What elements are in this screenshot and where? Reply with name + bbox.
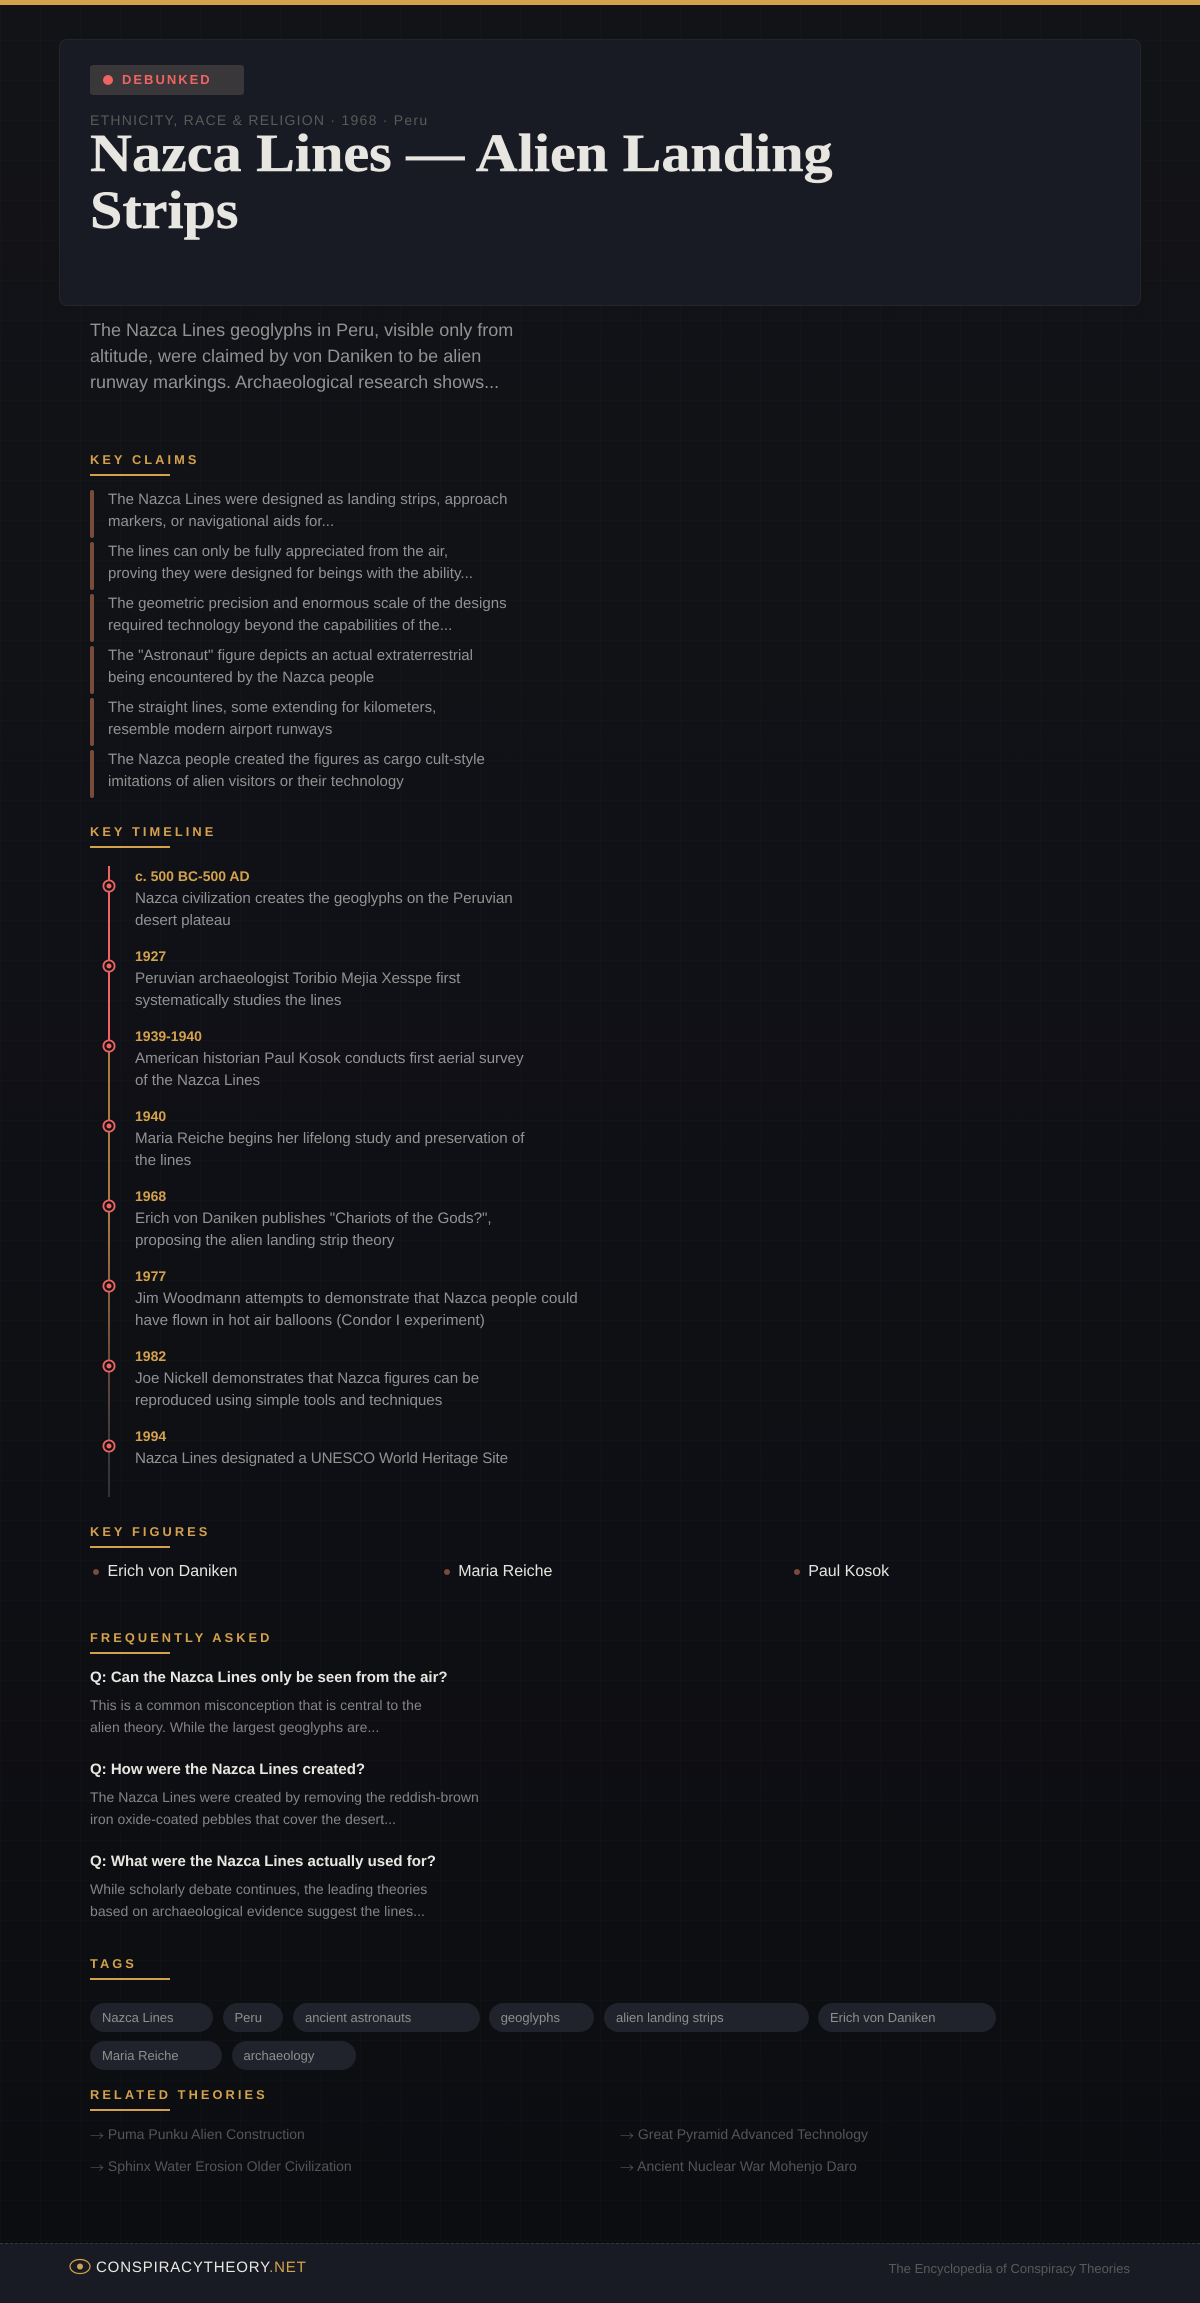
key figure: Erich von Daniken: Erich von Daniken bbox=[108, 1563, 237, 1580]
badge label: DEBUNKED bbox=[122, 72, 212, 87]
top accent bar bbox=[0, 0, 1200, 5]
timeline event: 1982 bbox=[102, 1348, 479, 1409]
timeline event: c. 500 BC-500 AD: desert plateau bbox=[135, 912, 231, 929]
claim 1: The Nazca Lines were designed as landing strips, approach bbox=[108, 491, 507, 508]
tag: Maria Reiche bbox=[102, 2048, 179, 2063]
icon: eye logo bbox=[69, 2258, 91, 2274]
timeline event: c. 500 BC-500 AD: c. 500 BC-500 AD bbox=[135, 868, 250, 884]
claim 2 bbox=[90, 542, 473, 590]
timeline event: 1940: 1940 bbox=[135, 1108, 166, 1124]
faq item 1: alien theory. While the largest geoglyphs are... bbox=[90, 1719, 379, 1735]
related theory link: → Ancient Nuclear War Mohenjo Daro bbox=[620, 2158, 857, 2178]
claim 6: imitations of alien visitors or their technology bbox=[108, 773, 404, 790]
claim 4: being encountered by the Nazca people bbox=[108, 669, 374, 686]
tag bbox=[222, 2003, 283, 2032]
faq item 1: Q: Can the Nazca Lines only be seen from the air? bbox=[90, 1669, 448, 1686]
timeline event: 1982: reproduced using simple tools and techniques bbox=[135, 1392, 442, 1409]
timeline event: c. 500 BC-500 AD: Nazca civilization creates the geoglyphs on the Peruvian bbox=[135, 890, 513, 907]
timeline event: 1968: Erich von Daniken publishes "Chariots of the Gods?", bbox=[135, 1210, 492, 1227]
footer bbox=[0, 2243, 1200, 2303]
tag bbox=[818, 2003, 996, 2032]
timeline event: 1939-1940 bbox=[102, 1028, 524, 1089]
tag: ancient astronauts bbox=[305, 2010, 411, 2025]
timeline event: 1982: 1982 bbox=[135, 1348, 166, 1364]
tag: Peru bbox=[234, 2010, 262, 2025]
tag: Nazca Lines bbox=[102, 2010, 174, 2025]
timeline event: 1968: 1968 bbox=[135, 1188, 166, 1204]
timeline event: 1927: Peruvian archaeologist Toribio Mejia Xesspe first bbox=[135, 970, 460, 987]
category meta line: ETHNICITY, RACE & RELIGION · 1968 · Peru bbox=[90, 112, 428, 128]
timeline event: 1927 bbox=[102, 948, 460, 1009]
timeline event: 1939-1940: 1939-1940 bbox=[135, 1028, 202, 1044]
intro text: altitude, were claimed by von Daniken to be alien bbox=[90, 346, 481, 366]
faq item 1: This is a common misconception that is central to the bbox=[90, 1697, 422, 1713]
timeline event: 1939-1940: American historian Paul Kosok conducts first aerial survey bbox=[135, 1050, 524, 1067]
timeline event: 1994: Nazca Lines designated a UNESCO World Heritage Site bbox=[135, 1450, 508, 1467]
key figure: Maria Reiche: Maria Reiche bbox=[458, 1563, 552, 1580]
tag bbox=[90, 2041, 222, 2070]
claim 5: The straight lines, some extending for kilometers, bbox=[108, 699, 436, 716]
claim 3: required technology beyond the capabilities of the... bbox=[108, 617, 452, 634]
timeline event: 1994: 1994 bbox=[135, 1428, 166, 1444]
intro text: The Nazca Lines geoglyphs in Peru, visible only from bbox=[90, 320, 513, 340]
claim 1 bbox=[90, 490, 507, 538]
faq item 3 bbox=[90, 1853, 436, 1919]
timeline event: 1982: Joe Nickell demonstrates that Nazca figures can be bbox=[135, 1370, 479, 1387]
tag list bbox=[90, 2003, 996, 2070]
timeline event: 1939-1940: of the Nazca Lines bbox=[135, 1072, 260, 1089]
site logo wordmark: CONSPIRACYTHEORY.NET bbox=[96, 2259, 307, 2276]
tag: geoglyphs bbox=[501, 2010, 560, 2025]
title: Strips bbox=[90, 180, 239, 240]
timeline event: 1977 bbox=[102, 1268, 578, 1329]
intro text bbox=[90, 320, 513, 392]
timeline event: 1940: the lines bbox=[135, 1152, 191, 1169]
claim 5: resemble modern airport runways bbox=[108, 721, 332, 738]
section heading: frequently asked: FREQUENTLY ASKED bbox=[90, 1630, 272, 1645]
panel: key claims list bbox=[90, 490, 507, 798]
title bbox=[90, 123, 833, 240]
faq item 3: While scholarly debate continues, the leading theories bbox=[90, 1881, 427, 1897]
claim 2: The lines can only be fully appreciated from the air, bbox=[108, 543, 448, 560]
timeline event: 1994 bbox=[102, 1428, 508, 1467]
timeline event: 1940: Maria Reiche begins her lifelong study and preservation of bbox=[135, 1130, 524, 1147]
section heading: key claims: KEY CLAIMS bbox=[90, 452, 200, 467]
claim 4: The "Astronaut" figure depicts an actual extraterrestrial bbox=[108, 647, 473, 664]
tag bbox=[90, 2003, 213, 2032]
claim 3 bbox=[90, 594, 507, 642]
faq item 2 bbox=[90, 1761, 479, 1827]
tag bbox=[489, 2003, 594, 2032]
section heading: key figures: KEY FIGURES bbox=[90, 1524, 210, 1539]
tag: Erich von Daniken bbox=[830, 2010, 936, 2025]
faq item 3: based on archaeological evidence suggest the lines... bbox=[90, 1903, 425, 1919]
section heading: key timeline: KEY TIMELINE bbox=[90, 824, 216, 839]
claim 3: The geometric precision and enormous scale of the designs bbox=[108, 595, 507, 612]
claim 2: proving they were designed for beings with the ability... bbox=[108, 565, 473, 582]
status badge: debunked bbox=[90, 65, 244, 95]
intro text: runway markings. Archaeological research shows... bbox=[90, 372, 499, 392]
faq item 2: Q: How were the Nazca Lines created? bbox=[90, 1761, 365, 1778]
key figure: Paul Kosok: Paul Kosok bbox=[808, 1563, 889, 1580]
related theory link: → Great Pyramid Advanced Technology bbox=[620, 2126, 868, 2146]
timeline event: 1977: Jim Woodmann attempts to demonstrate that Nazca people could bbox=[135, 1290, 578, 1307]
icon: status dot bbox=[103, 75, 113, 85]
section heading: tags: TAGS bbox=[90, 1956, 137, 1971]
claim 6 bbox=[90, 750, 485, 798]
tag: alien landing strips bbox=[616, 2010, 724, 2025]
timeline event: 1977: have flown in hot air balloons (Condor I experiment) bbox=[135, 1312, 485, 1329]
timeline spine bbox=[108, 866, 110, 1497]
footer tagline: The Encyclopedia of Conspiracy Theories bbox=[888, 2261, 1130, 2276]
faq item 2: iron oxide-coated pebbles that cover the desert... bbox=[90, 1811, 396, 1827]
timeline event: 1968: proposing the alien landing strip theory bbox=[135, 1232, 394, 1249]
tag: archaeology bbox=[244, 2048, 314, 2063]
related theory link: → Sphinx Water Erosion Older Civilization bbox=[90, 2158, 352, 2178]
claim 4 bbox=[90, 646, 473, 694]
related theory link: → Puma Punku Alien Construction bbox=[90, 2126, 305, 2146]
tag bbox=[293, 2003, 480, 2032]
timeline event: 1927: 1927 bbox=[135, 948, 166, 964]
timeline event: 1927: systematically studies the lines bbox=[135, 992, 341, 1009]
claim 5 bbox=[90, 698, 436, 746]
faq item 3: Q: What were the Nazca Lines actually used for? bbox=[90, 1853, 436, 1870]
tag bbox=[232, 2041, 356, 2070]
timeline event: 1940 bbox=[102, 1108, 524, 1169]
panel: hero header bbox=[59, 39, 1141, 306]
faq item 1 bbox=[90, 1669, 448, 1735]
claim 1: markers, or navigational aids for... bbox=[108, 513, 334, 530]
faq item 2: The Nazca Lines were created by removing the reddish-brown bbox=[90, 1789, 479, 1805]
title: Nazca Lines — Alien Landing bbox=[90, 123, 833, 183]
timeline event: 1977: 1977 bbox=[135, 1268, 166, 1284]
claim 6: The Nazca people created the figures as cargo cult-style bbox=[108, 751, 485, 768]
timeline event: 1968 bbox=[102, 1188, 492, 1249]
section heading: related theories: RELATED THEORIES bbox=[90, 2087, 268, 2102]
timeline bbox=[108, 866, 110, 1497]
tag bbox=[604, 2003, 809, 2032]
timeline event: c. 500 BC-500 AD bbox=[102, 868, 513, 929]
